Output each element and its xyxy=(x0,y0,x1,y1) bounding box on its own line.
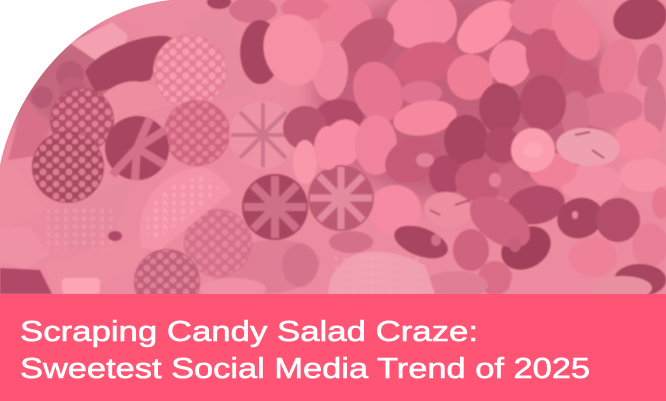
candy beans left of centre xyxy=(256,8,348,184)
title text: Sweetest Social Media Trend of 2025 xyxy=(20,353,590,385)
half moon slice xyxy=(140,168,231,250)
title text: Scraping Candy Salad Craze: xyxy=(20,316,478,348)
title text xyxy=(20,316,590,385)
round textured candies xyxy=(32,34,374,315)
bean highlights xyxy=(524,143,542,157)
jelly beans xyxy=(316,0,666,303)
flower candies xyxy=(229,101,297,169)
title banner xyxy=(0,294,666,401)
candy photo xyxy=(0,0,666,315)
rough sugar candies xyxy=(0,0,435,300)
